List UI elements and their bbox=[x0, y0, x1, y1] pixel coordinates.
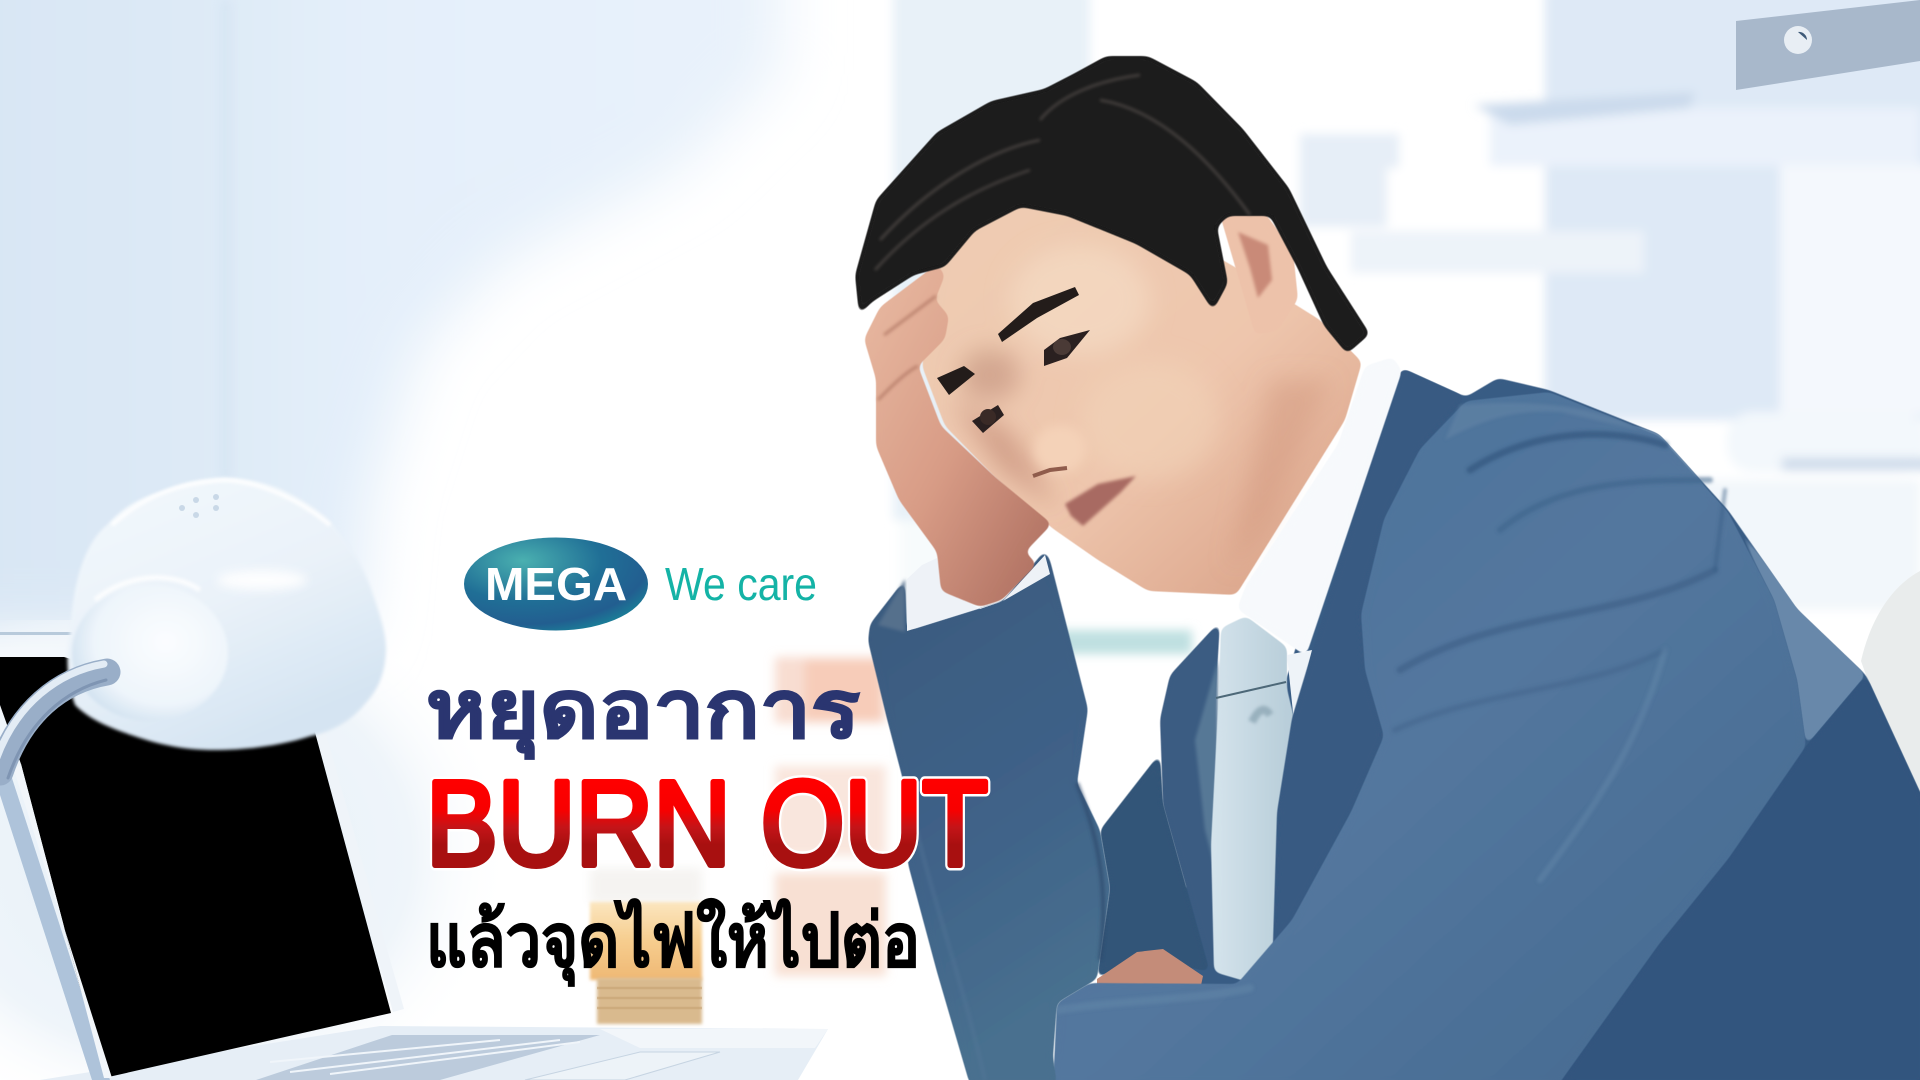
jacket front left bbox=[1160, 621, 1230, 972]
shirt collar bbox=[1237, 357, 1402, 656]
desk lamp bbox=[0, 478, 386, 778]
laptop base bbox=[40, 1026, 828, 1080]
man in suit bbox=[855, 56, 1920, 1080]
laptop hinge frame bbox=[0, 772, 110, 1080]
left sleeve bbox=[868, 550, 1110, 1080]
title line 2: BURN OUT: BURN OUT bbox=[426, 755, 988, 891]
face shading bbox=[950, 245, 1330, 570]
laptop screen bbox=[0, 657, 391, 1078]
title line 2: BURN OUT: BURN OUT bbox=[426, 755, 988, 891]
inner arm bbox=[1097, 753, 1210, 979]
blurred orange window bbox=[775, 657, 886, 976]
lapel bbox=[1272, 368, 1466, 975]
tie bbox=[1211, 616, 1294, 984]
logo oval bbox=[464, 538, 648, 630]
logo: MEGA We care: MEGA bbox=[485, 558, 627, 610]
hand under sleeve bbox=[1097, 949, 1203, 990]
facial features bbox=[937, 287, 1136, 526]
title line 1: หยุดอาการ bbox=[426, 665, 860, 760]
ear bbox=[1220, 205, 1298, 335]
jacket shoulder seam band bbox=[1620, 420, 1866, 746]
wall line bbox=[0, 632, 75, 635]
neck and face bbox=[922, 190, 1362, 595]
logo: MEGA We care bbox=[464, 538, 817, 630]
tagline: We care bbox=[665, 558, 817, 610]
lower left wall bbox=[0, 620, 540, 1080]
lamp arm bbox=[0, 664, 107, 778]
blurred window blinds bbox=[0, 0, 782, 640]
lamp dome bbox=[67, 478, 386, 750]
shirt cuff bbox=[907, 555, 1050, 631]
shirt gap bbox=[1287, 650, 1312, 722]
blurred shelves bbox=[893, 0, 1920, 760]
chair bbox=[1861, 571, 1920, 803]
hand on forehead bbox=[864, 264, 1052, 607]
title line 3: แล้วจุดไฟให้ไปต่อ bbox=[426, 897, 920, 987]
hair bbox=[855, 56, 1370, 354]
grey shelf box bbox=[1736, 0, 1920, 90]
jacket back bbox=[1180, 368, 1920, 1080]
jacket lower back bbox=[1558, 675, 1920, 1080]
lamp socket bbox=[72, 585, 228, 721]
candle bbox=[590, 868, 702, 1024]
arm wrinkles bbox=[1058, 434, 1725, 1010]
laptop bbox=[0, 657, 828, 1080]
right arm bbox=[1053, 392, 1806, 1080]
